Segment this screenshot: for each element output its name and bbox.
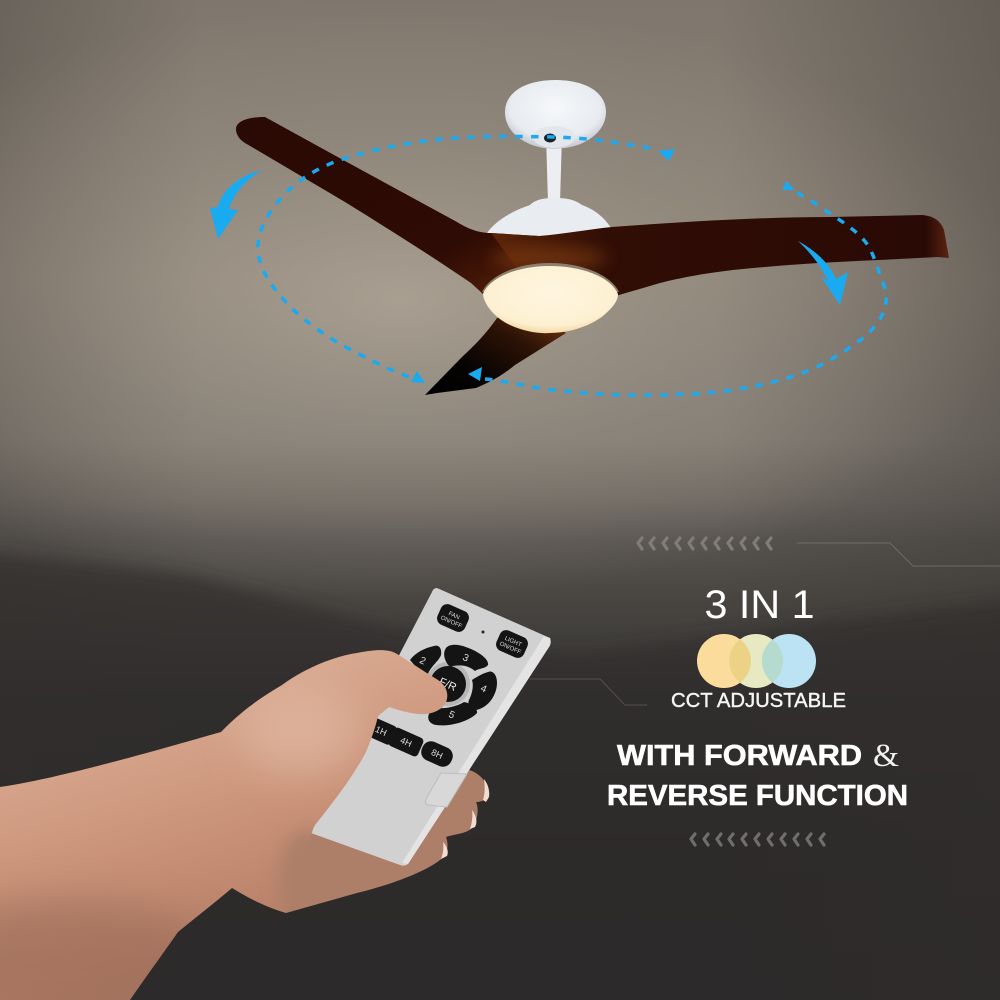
decorative circuit lines xyxy=(530,543,1000,705)
motor housing xyxy=(484,198,614,238)
fan stem xyxy=(546,135,562,203)
heading line: reverse function: REVERSE FUNCTION xyxy=(607,780,908,812)
button: fan on/off: FAN xyxy=(447,611,460,621)
label: CCT adjustable: CCT ADJUSTABLE xyxy=(671,690,846,712)
button: 2: 2 xyxy=(418,655,428,668)
button: 5 xyxy=(428,702,477,725)
button: light on/off xyxy=(494,628,530,660)
button: 2 xyxy=(410,646,441,674)
remote side highlight xyxy=(402,636,551,864)
button: light on/off: LIGHT xyxy=(504,636,522,649)
hand: arm, palm and thumb in front of the remote xyxy=(0,640,460,1000)
button: 8H: 8H xyxy=(430,747,444,761)
remote battery clip xyxy=(425,773,467,807)
fan ceiling canopy xyxy=(505,80,606,149)
button: fan on/off xyxy=(435,602,471,634)
blade: upper left xyxy=(236,117,560,294)
remote control xyxy=(309,588,551,866)
button: F/R xyxy=(430,666,466,702)
arrowhead: right arc xyxy=(782,181,795,190)
hand: palm and fingers behind the remote xyxy=(286,769,488,913)
remote body xyxy=(309,588,551,866)
arrowhead: lower left xyxy=(411,371,425,383)
heading: 3 in 1: 3 IN 1 xyxy=(704,583,814,627)
button: 4 xyxy=(468,672,497,710)
ampersand: & xyxy=(873,738,899,774)
warm glow around the lamp xyxy=(492,247,608,269)
button: light on/off: ON/OFF xyxy=(498,641,522,656)
canopy collar xyxy=(533,126,575,148)
button: 8H xyxy=(418,738,456,770)
curved arrow: right xyxy=(798,241,848,305)
blade: right xyxy=(491,215,949,300)
button: 5: 5 xyxy=(447,709,457,722)
speed button ring xyxy=(426,662,470,706)
ceiling fan xyxy=(236,80,949,395)
arrowhead: top arc xyxy=(658,149,675,161)
curved arrow: left xyxy=(210,170,262,239)
button: fan on/off: ON/OFF xyxy=(439,615,463,630)
button: 4H: 4H xyxy=(399,735,413,749)
dashed rotation path: lower right arc xyxy=(485,192,886,395)
heading line: with forward: WITH FORWARD xyxy=(617,740,862,772)
button: 1H xyxy=(363,716,399,746)
arrowhead: lower arc xyxy=(468,367,482,381)
button: 3 xyxy=(444,645,488,671)
button: F/R: F/R xyxy=(437,676,458,694)
blade: lower xyxy=(425,310,566,395)
button: 3: 3 xyxy=(461,652,471,665)
dashed rotation path: upper left arc xyxy=(258,136,650,378)
lamp rim xyxy=(482,263,619,292)
indicator dot xyxy=(482,630,484,634)
icon: three overlapping CCT colour circles xyxy=(697,634,816,688)
lamp globe xyxy=(483,266,618,333)
chevrons: bottom row xyxy=(691,834,824,845)
button: 1H: 1H xyxy=(374,724,388,738)
chevrons: top row xyxy=(638,538,771,549)
fingernails xyxy=(441,779,489,859)
button: 4: 4 xyxy=(479,683,489,696)
button: 4H xyxy=(387,726,425,758)
